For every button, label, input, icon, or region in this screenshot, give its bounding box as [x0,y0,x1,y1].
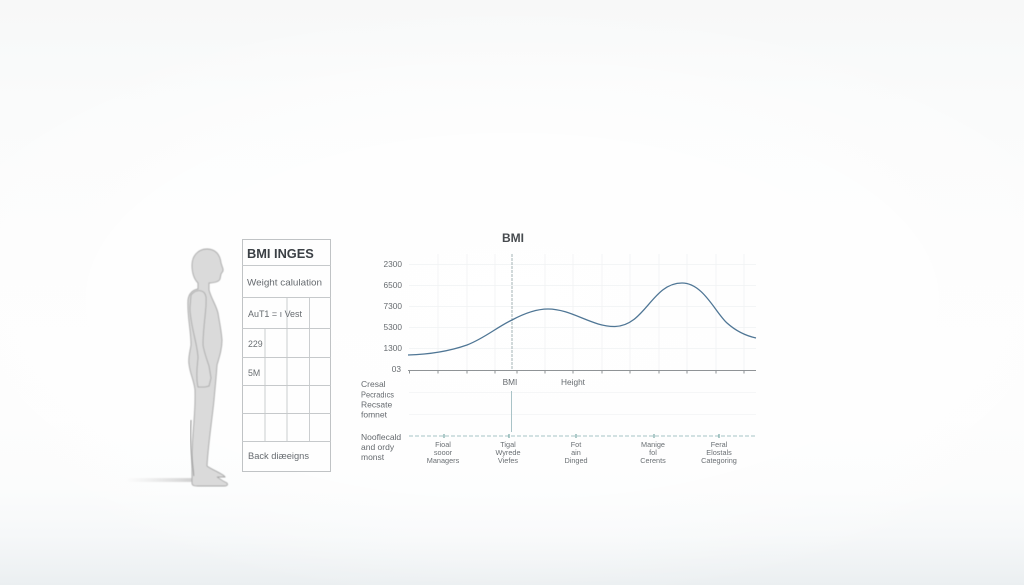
table row: formula: AuT1 = ı Vest [248,309,303,319]
category label 2: Tigal [500,440,516,449]
x axis [408,370,756,374]
category label 5: Categoring [701,456,737,465]
category label 1: Managers [427,456,460,465]
category label 4: Manige [641,440,665,449]
panel: BMI table [242,240,331,472]
y axis labels: 1300 [384,343,402,353]
category label 1: sooor [434,448,453,457]
icon: standing human figure [125,249,228,486]
category label 2 [495,440,521,465]
y axis labels: 03 [392,364,401,374]
axis labels: BMI and Height: Height [561,377,586,387]
data curve [408,283,756,355]
category label 2: Viefes [498,456,518,465]
table value: 5M: 5M [248,368,260,378]
table value: 229: 229 [248,339,263,349]
lower panel grid and timeline [409,391,756,438]
axis labels: BMI and Height: BMI [503,377,517,387]
left labels: upper group: Cresal [361,379,386,389]
category label 5 [701,440,737,465]
table heading: BMI INGES [247,246,314,261]
category label 1 [427,440,460,465]
category label 3 [564,440,588,465]
category label 4: fol [649,448,657,457]
BMI marker line [511,254,513,370]
left labels: lower group: and ordy [361,442,395,452]
line chart [384,254,756,374]
axis labels: BMI and Height [503,377,586,387]
left labels: upper group [361,379,394,420]
y axis labels: 6500 [384,280,402,290]
table row: weight calculation: Weight calulation [247,278,322,288]
category label 4 [640,440,666,465]
category label 4: Cerents [640,456,666,465]
category label 5: Feral [711,440,728,449]
left labels: upper group: Recsate [361,400,392,410]
left labels: lower group: monst [361,452,385,462]
y axis labels: 2300 [384,259,402,269]
y axis labels: 5300 [384,322,402,332]
category label 2: Wyrede [495,448,521,457]
y axis labels: 7300 [384,301,402,311]
left labels: upper group: fomnet [361,410,388,420]
left labels: upper group: Pecradıcs [361,390,394,400]
left labels: lower group [361,432,401,462]
category label 5: Elostals [706,448,732,457]
category label 3: Fot [571,440,581,449]
category label 3: Dinged [564,456,588,465]
left labels: lower group: Nooflecald [361,432,401,442]
chart title: BMI [502,231,524,245]
category label 3: ain [571,448,581,457]
y axis labels [384,259,402,374]
category label 1: Fioal [435,440,451,449]
table footer: Back diæeigns [248,451,309,461]
